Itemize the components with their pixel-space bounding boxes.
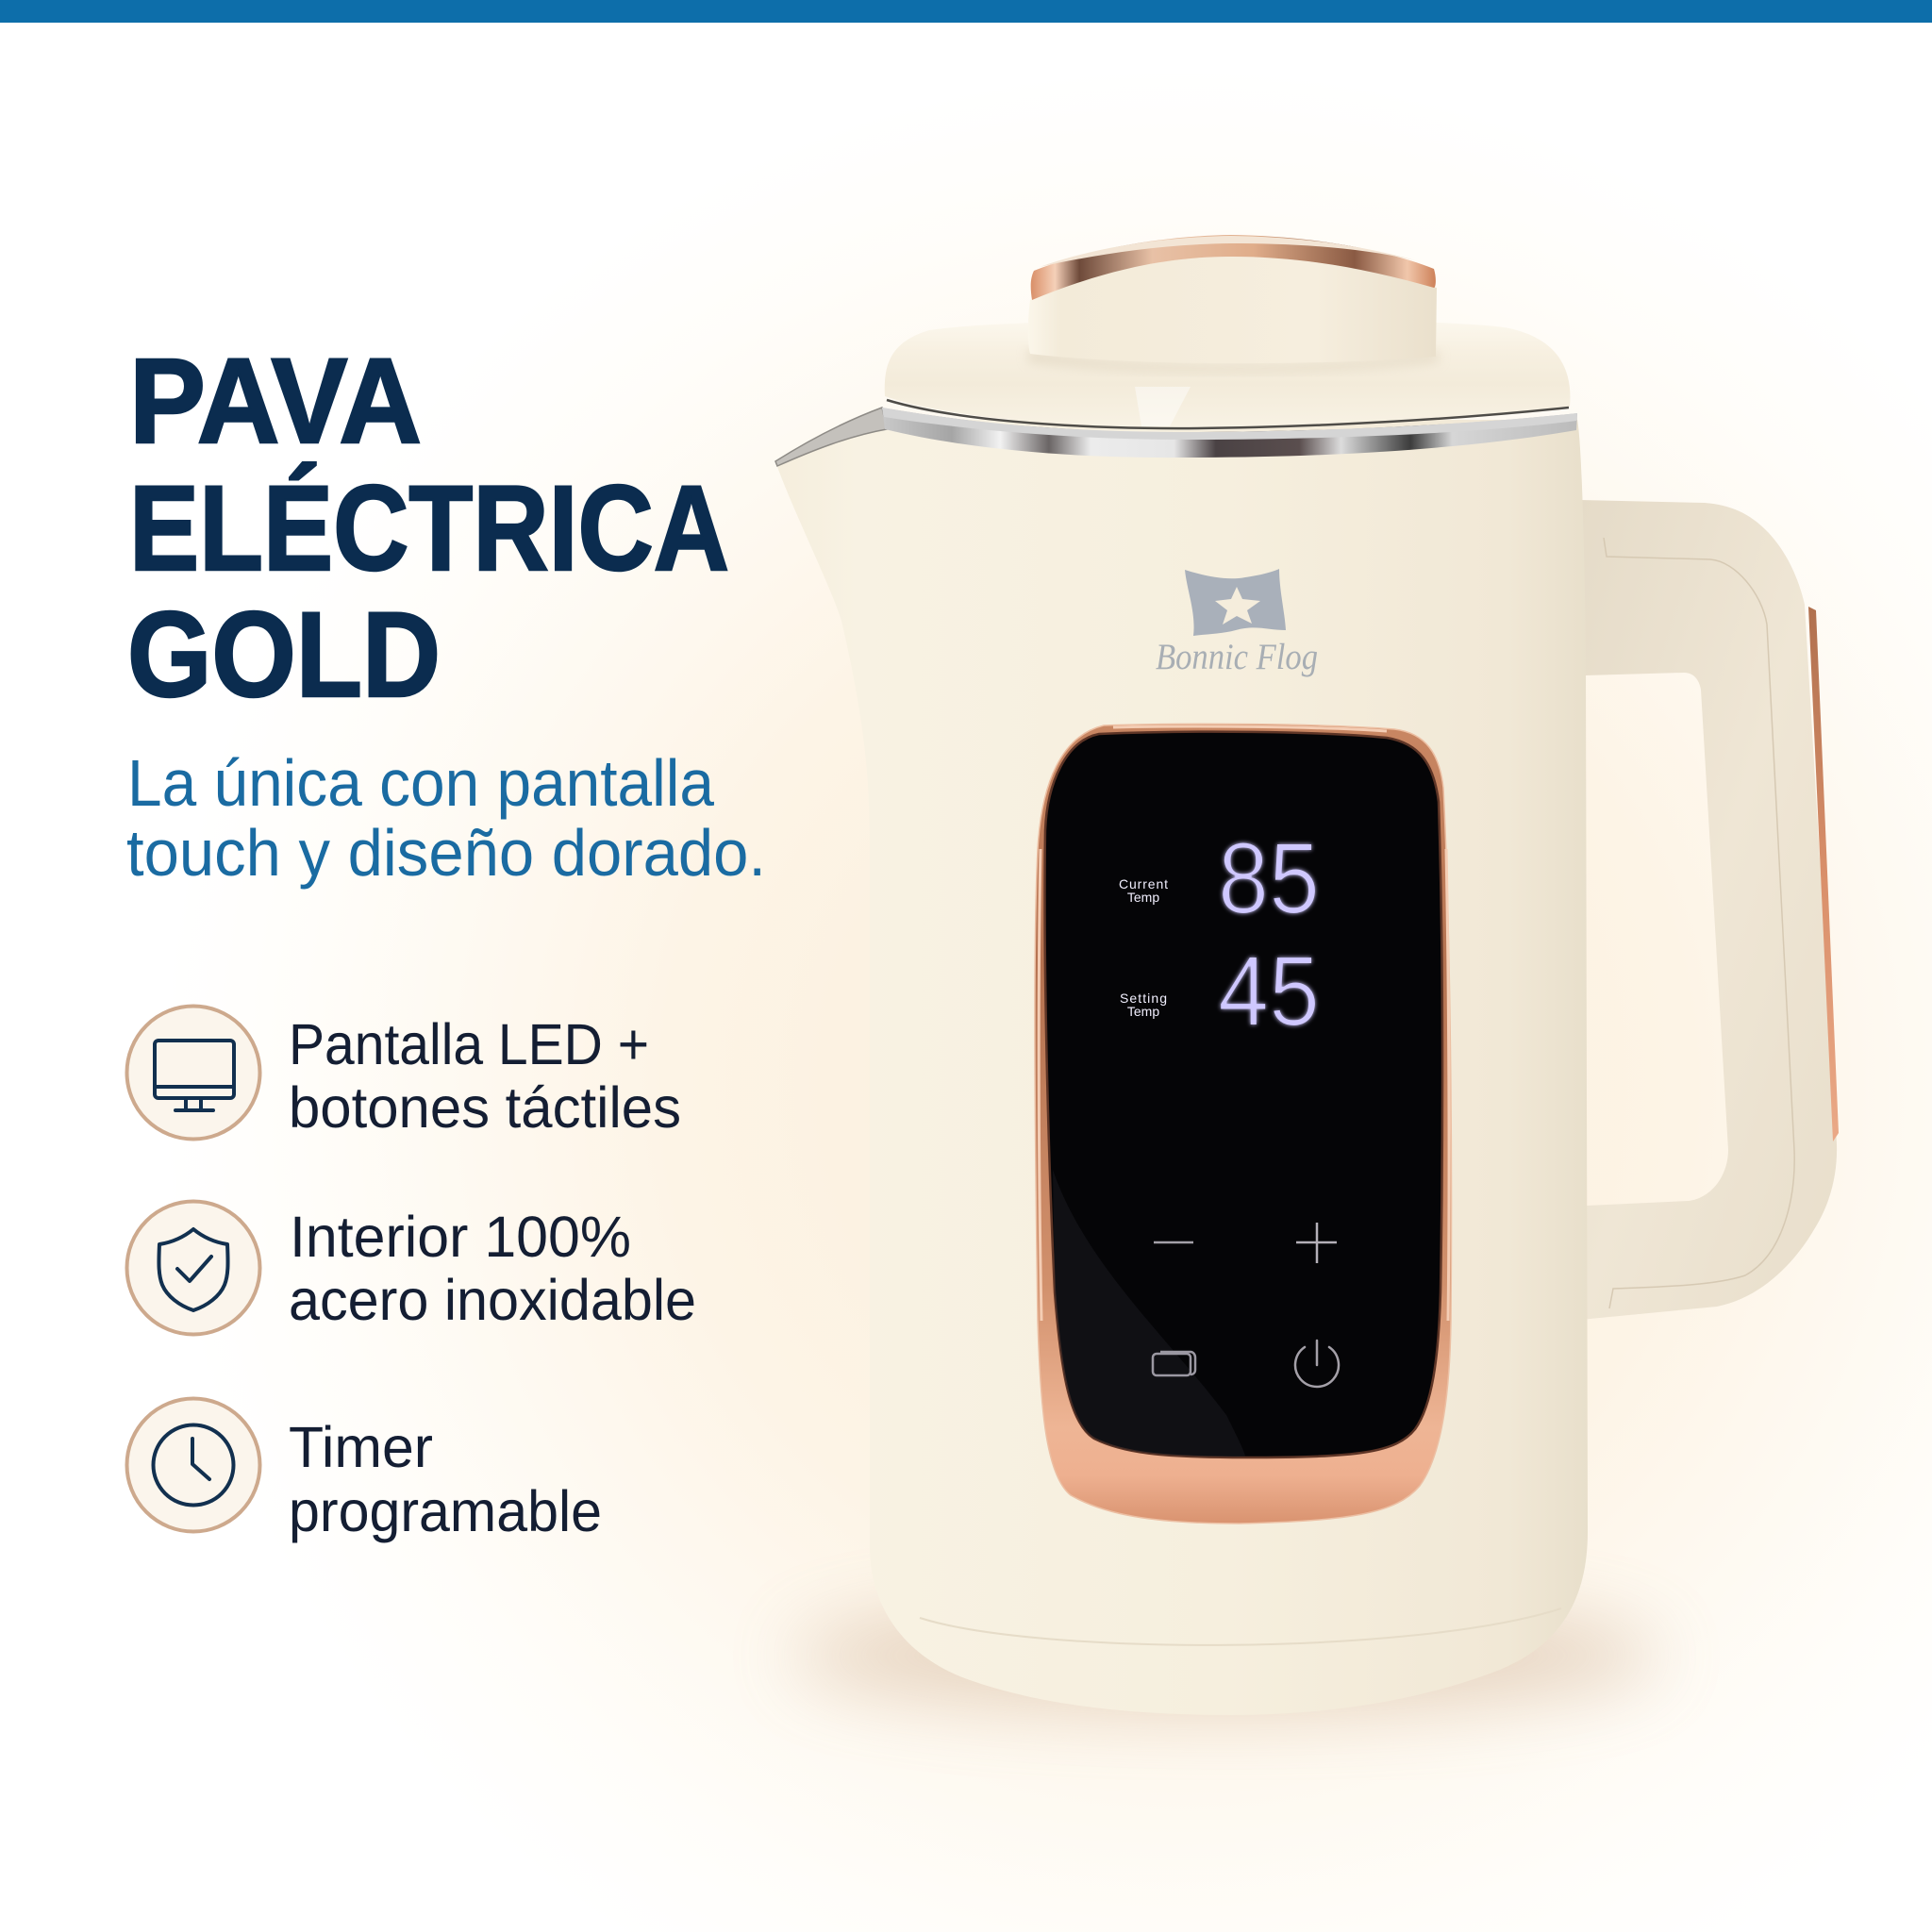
kettle handle xyxy=(1580,500,1839,1320)
icon: monitor xyxy=(126,1006,260,1140)
kettle product xyxy=(775,235,1839,1715)
kettle shadow xyxy=(792,1599,1660,1712)
icon: menu button xyxy=(1153,1352,1195,1375)
feature text: stainless steel: Interior 100% xyxy=(290,1205,631,1269)
frame highlights xyxy=(1039,726,1449,1321)
feature text: timer xyxy=(289,1415,602,1543)
icon: plus xyxy=(1296,1223,1337,1263)
current temp label: Temp xyxy=(1127,890,1159,905)
subtitle: La única con pantalla xyxy=(127,746,714,820)
kettle lid xyxy=(885,319,1570,428)
kettle body xyxy=(776,420,1588,1715)
current temp reading: 85 xyxy=(1218,821,1320,935)
feature text: timer: programable xyxy=(289,1479,602,1543)
feature: stainless steel xyxy=(126,1202,696,1334)
title: PAVA xyxy=(129,334,422,469)
control panel xyxy=(1035,724,1452,1524)
icon: flag with star xyxy=(1185,569,1286,636)
brand logo xyxy=(1156,569,1318,677)
top bar xyxy=(0,0,1932,23)
setting temp reading: 45 xyxy=(1218,936,1320,1047)
title: ELÉCTRICA xyxy=(129,461,729,596)
feature: timer xyxy=(126,1398,602,1543)
lid knob xyxy=(1028,235,1439,372)
subtitle xyxy=(126,746,766,890)
feature: LED screen xyxy=(126,1006,681,1140)
spout lip xyxy=(775,408,887,466)
rose gold frame xyxy=(1035,724,1452,1524)
setting temp label xyxy=(1120,991,1167,1019)
feature text: LED screen: botones táctiles xyxy=(289,1075,681,1140)
setting temp label: Temp xyxy=(1127,1004,1159,1019)
feature text: LED screen: Pantalla LED + xyxy=(289,1012,649,1076)
current temp label xyxy=(1119,876,1168,905)
feature text: timer: Timer xyxy=(289,1415,433,1479)
feature text: LED screen xyxy=(289,1012,681,1140)
title: GOLD xyxy=(127,588,441,723)
icon: shield xyxy=(126,1202,260,1334)
steel band xyxy=(882,408,1577,458)
subtitle: touch y diseño dorado. xyxy=(126,816,766,890)
feature text: stainless steel: acero inoxidable xyxy=(289,1268,696,1332)
black glass display xyxy=(1044,732,1442,1457)
rose gold strip xyxy=(1808,607,1839,1141)
icon: minus xyxy=(1154,1241,1193,1243)
title xyxy=(127,334,729,723)
feature text: stainless steel xyxy=(289,1205,696,1332)
logo text: Bonnic Flog xyxy=(1156,637,1318,677)
current temp label: Current xyxy=(1119,876,1168,891)
body base seam xyxy=(920,1608,1561,1645)
rose gold knob trim xyxy=(1031,235,1436,300)
icon: clock xyxy=(126,1398,260,1532)
setting temp label: Setting xyxy=(1120,991,1167,1006)
icon: power xyxy=(1295,1341,1339,1387)
